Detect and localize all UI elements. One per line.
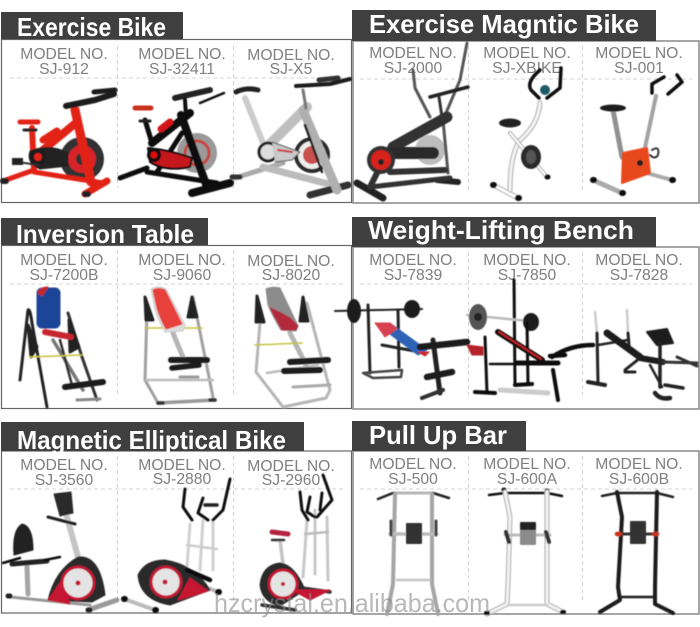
heading: Weight-Lifting Bench: Weight-Lifting Bench <box>368 215 634 245</box>
model label: SJ-2880: SJ-2880 <box>153 471 211 488</box>
model label: SJ-32411 <box>138 46 226 78</box>
model label: SJ-600B: MODEL NO. <box>595 456 683 473</box>
model label: SJ-7828: SJ-7828 <box>610 267 668 284</box>
panel: Magnetic Elliptical Bike <box>1 422 352 613</box>
product: red inversion table SJ-9060 <box>145 287 215 403</box>
model label: SJ-9060 <box>138 252 226 284</box>
model label: SJ-2000 <box>369 45 457 77</box>
panel: Exercise Magntic Bike <box>352 9 699 203</box>
model label: SJ-X5: MODEL NO. <box>247 47 335 64</box>
model label: SJ-600A: SJ-600A <box>497 471 558 488</box>
model label: SJ-7850 <box>483 252 571 284</box>
model label: SJ-7839 <box>369 252 457 284</box>
model label: SJ-XBIKE: SJ-XBIKE <box>492 60 562 77</box>
model label: SJ-2000: MODEL NO. <box>369 45 457 62</box>
watermark: hzcrystal.en.alibaba.com <box>214 588 490 618</box>
model label: SJ-001: SJ-001 <box>614 60 664 77</box>
model label: SJ-001 <box>595 45 683 77</box>
model label: SJ-2960 <box>247 458 335 489</box>
model label: SJ-2960: MODEL NO. <box>247 458 335 475</box>
model label: SJ-32411: SJ-32411 <box>149 61 215 78</box>
model label: SJ-500: SJ-500 <box>388 471 438 488</box>
model label: SJ-7839: SJ-7839 <box>384 267 442 284</box>
model label: SJ-600A: MODEL NO. <box>483 456 571 473</box>
model label: SJ-7200B: MODEL NO. <box>20 252 108 269</box>
heading: Exercise Bike: Exercise Bike <box>17 12 166 42</box>
model label: SJ-500 <box>369 456 457 488</box>
product: elliptical bike SJ-2960 <box>260 475 332 610</box>
model label: SJ-9060: SJ-9060 <box>153 267 211 284</box>
product: elliptical SJ-2880 <box>124 479 230 610</box>
model label: SJ-3560: MODEL NO. <box>20 457 108 474</box>
model label: SJ-8020: MODEL NO. <box>247 253 335 270</box>
model label: SJ-9060: MODEL NO. <box>138 252 226 269</box>
model label: SJ-32411: MODEL NO. <box>138 46 226 63</box>
model label: SJ-2000: SJ-2000 <box>384 60 442 77</box>
model label: SJ-7828: MODEL NO. <box>595 252 683 269</box>
panel: Exercise Bike <box>1 12 352 202</box>
product: pull up bar SJ-500 <box>378 493 449 614</box>
product: weight bench SJ-7850 <box>467 280 593 400</box>
model label: SJ-7828 <box>595 252 683 284</box>
model label: SJ-8020 <box>247 253 335 284</box>
heading: Exercise Magntic Bike: Exercise Magntic Bike <box>369 9 639 39</box>
product: weight bench SJ-7839 <box>335 299 467 398</box>
model label: SJ-3560 <box>20 457 108 489</box>
product: recumbent bike SJ-3560 <box>3 492 117 610</box>
model label: SJ-600B: SJ-600B <box>609 471 669 488</box>
model label: SJ-600A <box>483 456 571 488</box>
heading: Inversion Table: Inversion Table <box>16 219 194 249</box>
model label: SJ-912 <box>20 46 108 78</box>
heading: Pull Up Bar: Pull Up Bar <box>369 420 507 450</box>
model label: SJ-912: MODEL NO. <box>20 46 108 63</box>
product: weight bench SJ-7828 <box>588 310 697 398</box>
product: gray inversion table SJ-8020 <box>255 287 330 407</box>
model label: SJ-7850: MODEL NO. <box>483 252 571 269</box>
model label: SJ-2880 <box>138 457 226 488</box>
model label: SJ-X5: SJ-X5 <box>270 61 313 78</box>
model label: SJ-X5 <box>247 47 335 78</box>
panel: Pull Up Bar <box>352 420 699 614</box>
product: pull up bar SJ-600A <box>486 488 564 614</box>
model label: SJ-XBIKE: MODEL NO. <box>483 45 571 62</box>
model label: SJ-XBIKE <box>483 45 571 77</box>
product: black exercise bike SJ-32411 <box>120 90 230 193</box>
model label: SJ-3560: SJ-3560 <box>35 472 93 489</box>
model label: SJ-500: MODEL NO. <box>369 456 457 473</box>
model label: SJ-7850: SJ-7850 <box>498 267 556 284</box>
heading: Magnetic Elliptical Bike: Magnetic Elliptical Bike <box>17 425 286 455</box>
model label: SJ-7200B: SJ-7200B <box>30 267 98 284</box>
product: pull up bar SJ-600B <box>600 492 673 613</box>
model label: SJ-2880: MODEL NO. <box>138 457 226 474</box>
product: upright bike SJ-001 <box>593 75 682 193</box>
product: folding bike SJ-XBIKE <box>493 68 561 198</box>
model label: SJ-912: SJ-912 <box>39 61 89 78</box>
product: silver exercise bike SJ-X5 <box>232 78 350 195</box>
model label: SJ-7200B <box>20 252 108 284</box>
model label: SJ-7839: MODEL NO. <box>369 252 457 269</box>
model label: SJ-600B <box>595 456 683 488</box>
model label: SJ-001: MODEL NO. <box>595 45 683 62</box>
product: elliptical bike SJ-2000 <box>357 43 468 198</box>
model label: SJ-8020: SJ-8020 <box>262 267 320 284</box>
model label: SJ-2960: SJ-2960 <box>262 472 320 489</box>
product: blue inversion table SJ-7200B <box>20 287 103 407</box>
panel: Weight-Lifting Bench <box>335 215 699 409</box>
panel: Inversion Table <box>1 218 352 408</box>
product: red exercise bike SJ-912 <box>3 90 115 194</box>
